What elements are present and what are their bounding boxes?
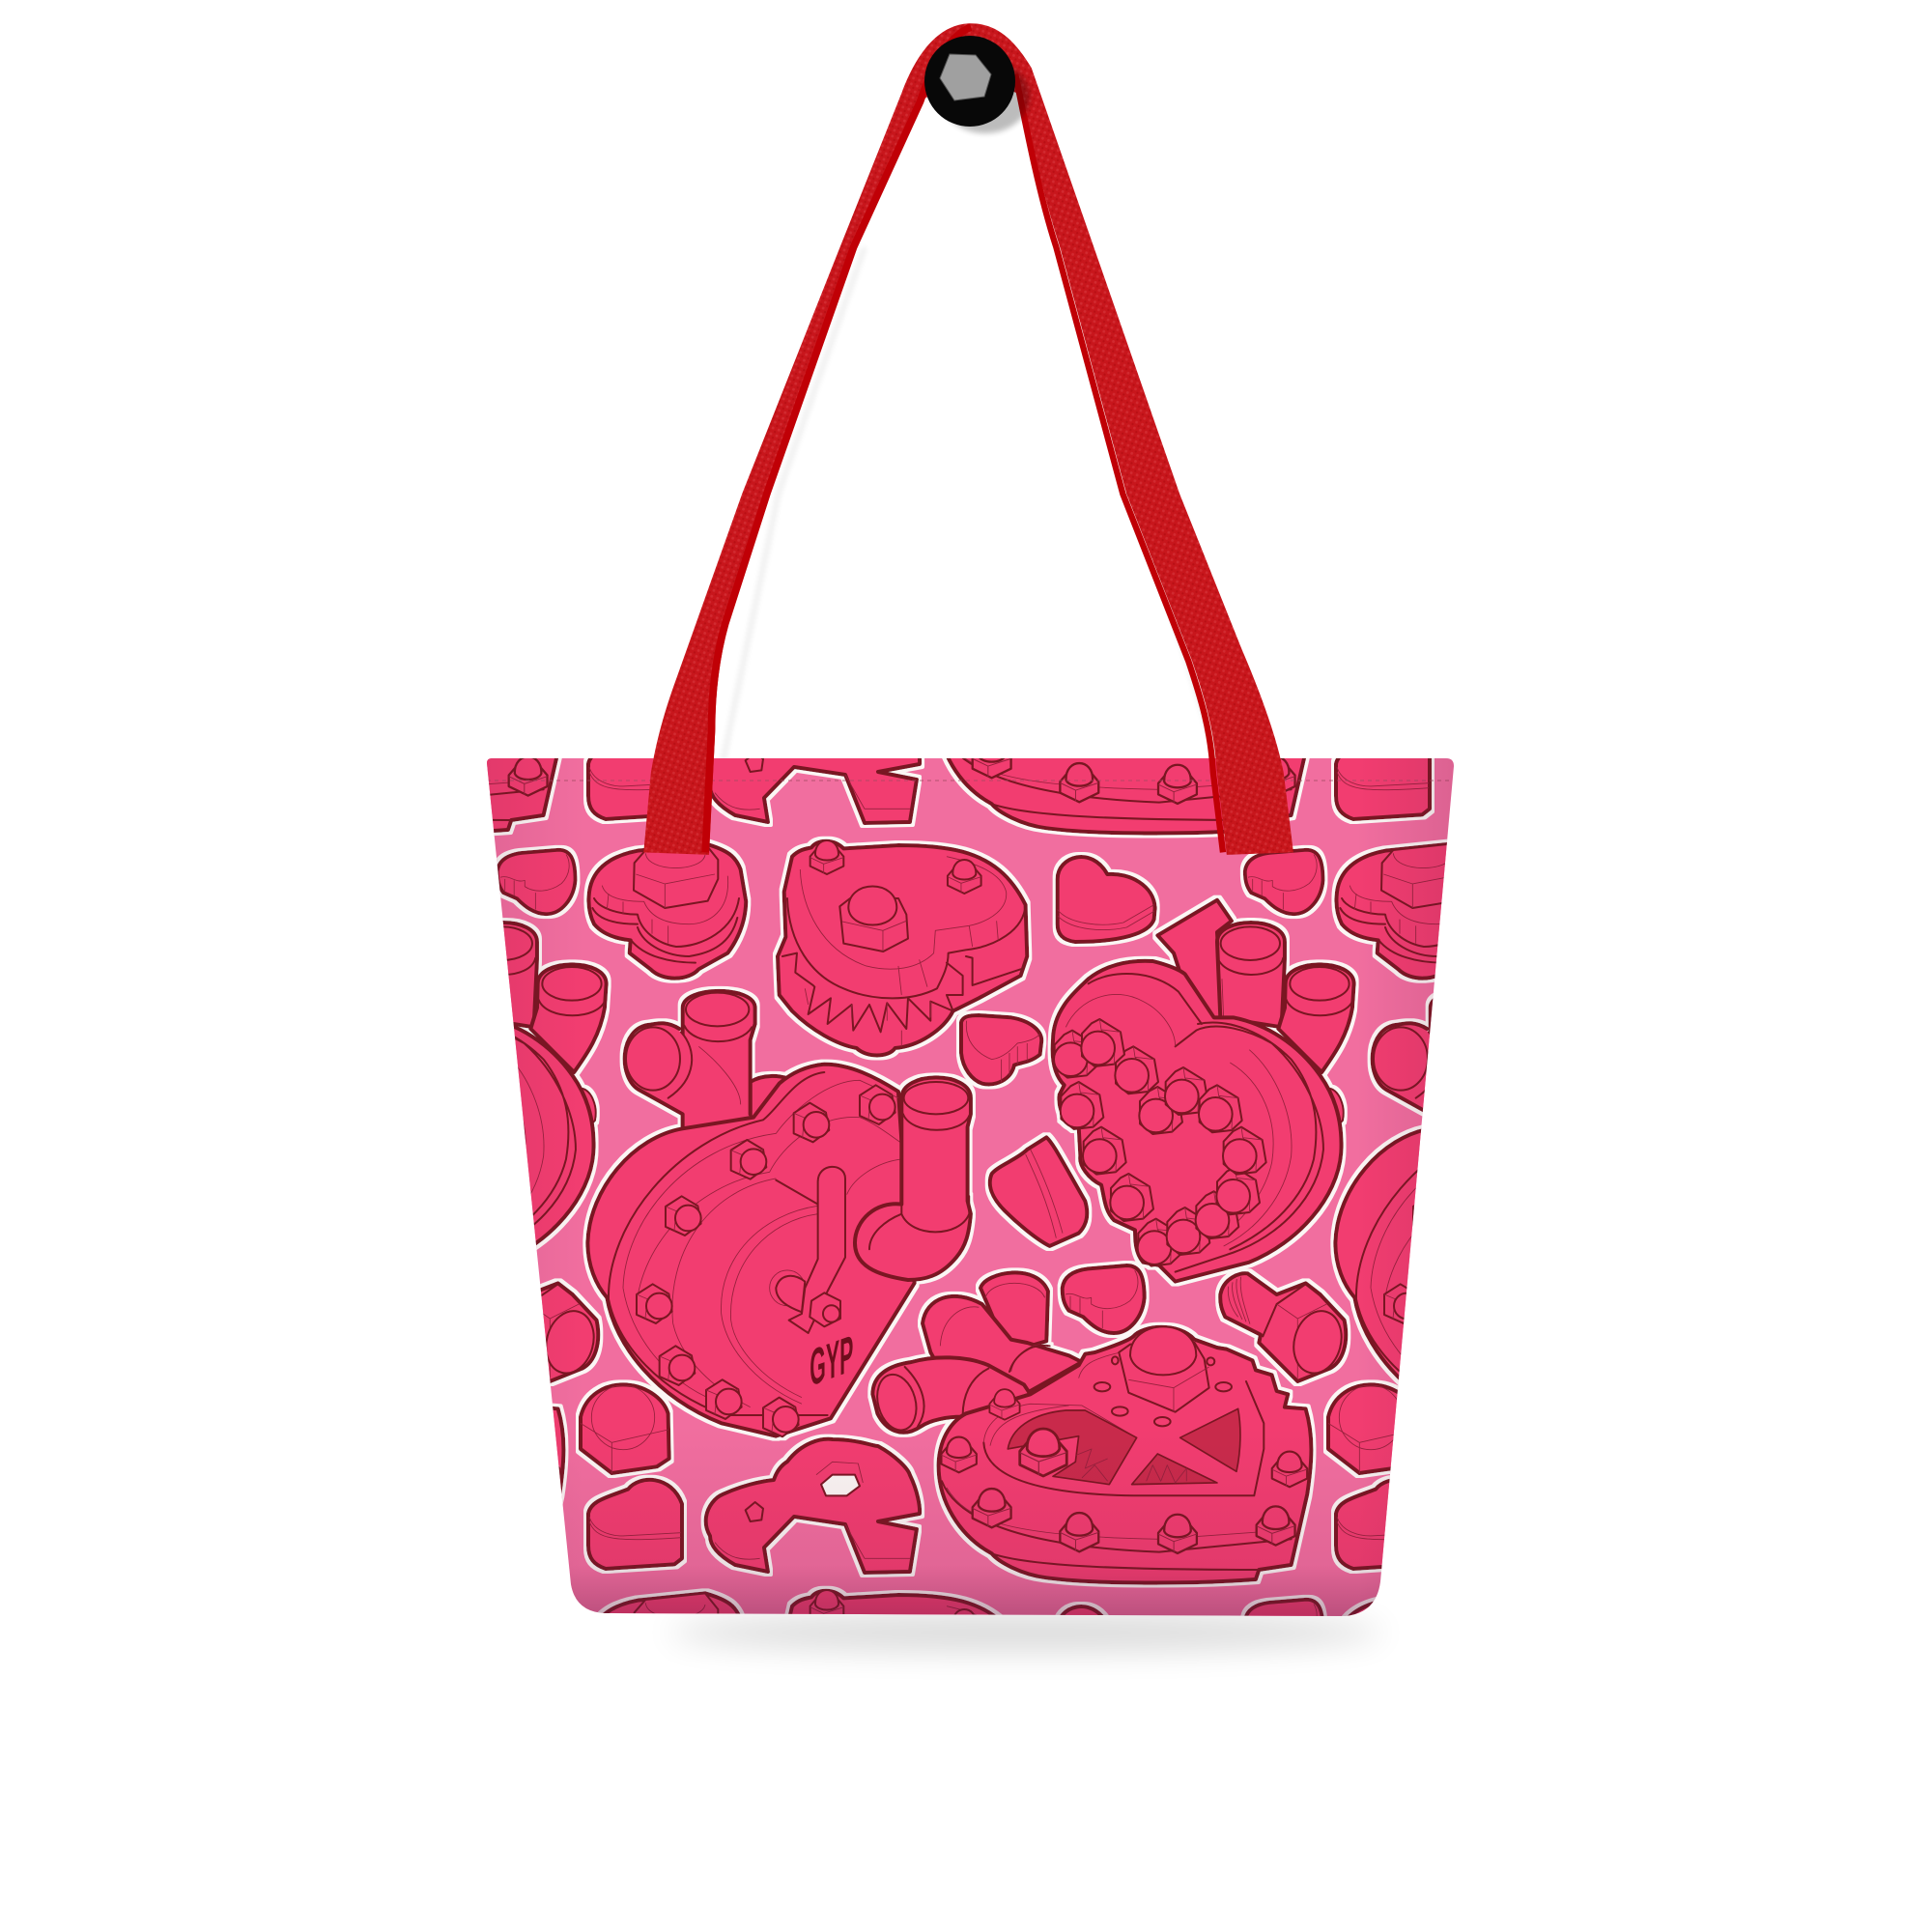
heart pump with ring of bolts <box>1053 900 1354 1282</box>
big heart pump <box>587 991 971 1436</box>
pattern repeat: valve top <box>871 523 1311 834</box>
small heart centre <box>961 1015 1041 1084</box>
pattern repeat: valve top left <box>124 523 563 834</box>
pattern repeat: valve left <box>124 1272 563 1583</box>
bottom fold shading <box>469 744 1473 1618</box>
stacked heart with nut <box>588 843 746 979</box>
panel: tote bag body <box>487 758 1454 1616</box>
logo: GYP <box>810 1323 853 1398</box>
tilted heart <box>990 1137 1087 1246</box>
strap: handle loop <box>643 23 1293 855</box>
wrench <box>706 1439 920 1573</box>
top hem stitching <box>487 780 1454 781</box>
strap wall shadows <box>723 247 1219 763</box>
gear heart <box>778 840 1027 1055</box>
peg hex socket <box>940 54 991 100</box>
pattern repeat: stack bottom <box>597 1588 745 1613</box>
small heart upper left <box>497 850 576 914</box>
pattern repeat: stack bottom right <box>1341 1597 1376 1616</box>
pattern repeat: big heart right side <box>1330 993 1434 1385</box>
pattern repeat: upright heart bottom <box>1058 1606 1155 1691</box>
peg shadow <box>941 60 1030 133</box>
pattern repeat: stack right <box>1331 838 1447 983</box>
bag fabric <box>469 744 1473 1633</box>
pattern repeat: heart top right <box>1336 730 1430 819</box>
pattern repeat: gear heart bottom <box>778 1590 1027 1804</box>
pattern repeat: bolt left <box>472 1273 601 1381</box>
hex bolt <box>1220 1273 1349 1381</box>
cap nut <box>581 1384 669 1473</box>
small heart lower centre <box>1063 1265 1145 1333</box>
icon: wall peg <box>924 36 1015 127</box>
peg head <box>924 36 1015 127</box>
straps <box>643 23 1293 855</box>
strap: dark edge right <box>1015 74 1223 852</box>
pattern repeat: small heart bottom right <box>1240 1594 1327 1616</box>
pattern repeat: small heart right <box>1245 850 1323 914</box>
strap: dark edge left <box>705 27 971 852</box>
cut-away valve heart <box>871 1272 1311 1583</box>
pattern repeat: small heart bottom <box>497 1600 576 1663</box>
heart lower left <box>588 1480 682 1569</box>
pattern repeat: bolt heart left side <box>502 918 611 1250</box>
upright heart <box>1058 857 1155 942</box>
pattern repeat: heart right <box>1336 1480 1430 1569</box>
side shading <box>487 744 1454 1618</box>
pattern repeat: cap nut right <box>1328 1384 1417 1473</box>
pattern repeat: wrench top <box>706 690 920 823</box>
bag ground shadow <box>668 1613 1383 1652</box>
pattern repeat: heart top <box>588 730 682 819</box>
